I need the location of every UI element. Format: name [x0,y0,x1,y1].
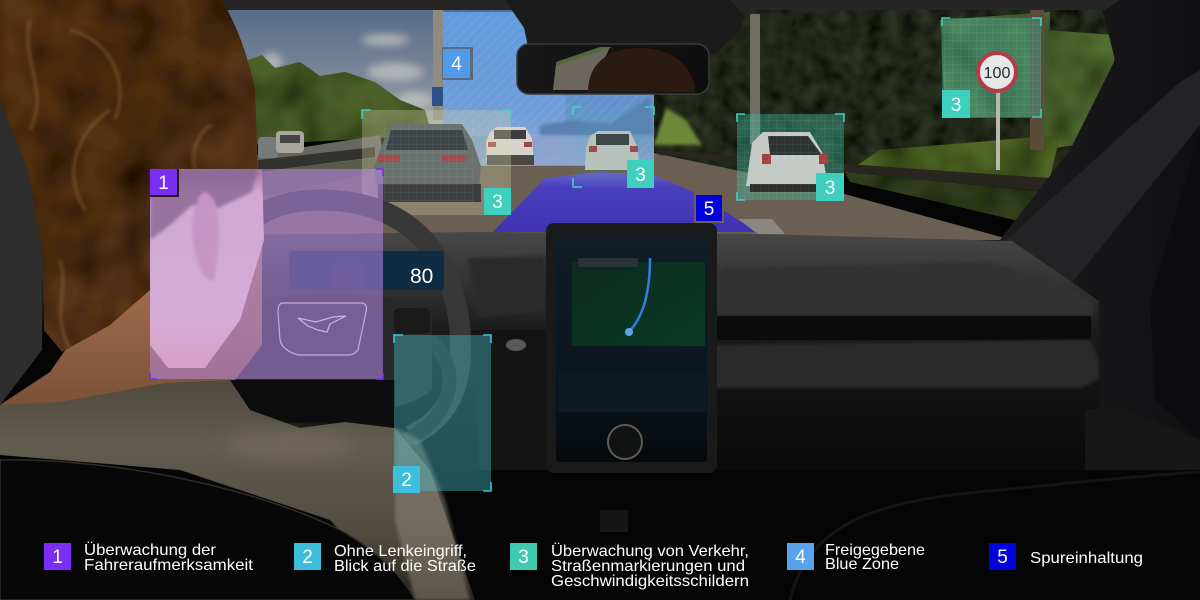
wheel hub [215,293,432,416]
badge 5: 5 [704,199,714,220]
dashboard top [222,232,1098,330]
right door trim [1150,130,1200,440]
overlay box 3a: traffic left [362,110,511,215]
legend [44,541,1143,590]
mirror green verge [556,47,612,66]
far road left [250,135,385,185]
legend item 5: Spureinhaltung [1030,550,1143,567]
legend item 4: Freigegebene [825,542,925,559]
far-left cars [258,131,304,158]
road [220,150,1012,240]
map [572,262,705,346]
lower cabin [200,300,1100,500]
overlay box 1: driver attention [150,169,383,379]
guard rail far [258,147,375,172]
right pillar [1000,0,1200,480]
legend item 2: Ohne Lenkeingriff, [334,543,467,560]
ear [192,192,219,281]
steering wheel [215,200,461,440]
sky [225,6,565,136]
legend item 1: 1 [52,547,63,568]
highway pole [433,10,443,120]
legend item 2 [294,543,476,575]
overlay box 3b: traffic centre [573,107,654,188]
badge 5 [694,193,724,223]
badge 3 centre: 3 [635,165,646,186]
silver hatch [585,131,640,170]
green slope [654,108,702,145]
mirror [517,44,709,94]
driver hair [0,0,258,352]
VW Polo [746,132,828,192]
wheel lower rim [405,340,449,440]
curls [28,20,212,350]
search bar [578,258,638,267]
distant trees tint [540,96,654,135]
wheel rim [218,200,461,436]
left spoke controls [222,312,258,342]
vent strip [716,316,1091,340]
route line [629,258,650,332]
climate panel [558,372,706,412]
lamp pole right [750,14,760,144]
clouds [262,34,433,108]
driver neck [0,200,262,410]
driver in mirror [588,48,695,92]
instrument cluster [289,251,444,290]
shirt highlight on shoulder [225,431,355,459]
overlay box 3d: speed sign [942,18,1041,117]
legend item 3: Straßenmarkierungen und [551,558,745,575]
legend item 4: Blue Zone [825,556,899,573]
legend item 4: 4 [795,547,806,568]
corner brackets [394,335,491,491]
legend item 3 [510,542,749,590]
pillar highlight [1003,70,1200,295]
badge 2 [393,466,420,493]
road through blue zone [470,135,654,166]
badge 2: 2 [401,470,412,491]
car: grey sedan [374,124,481,202]
instrument cluster: 80 [410,265,433,288]
temperature knob [608,425,642,459]
left dash dark panel [468,256,546,318]
overlay: lane keeping area (5) [493,172,757,232]
badge 3 centre [627,160,654,188]
left console area [470,330,546,470]
headrest [0,100,43,405]
driver shirt [0,380,475,600]
speed limit sign 100 [978,53,1016,170]
white SUV [486,127,534,165]
blue road sign [432,87,443,106]
trees left [248,55,432,145]
corner brackets [150,169,383,379]
pony badge pad [278,303,366,355]
legend item 1: Fahreraufmerksamkeit [84,557,254,574]
legend item 5 [989,543,1143,570]
speed limit sign 100: 100 [984,65,1011,82]
legend item 1: Überwachung der [84,541,217,559]
badge 3 right: 3 [825,178,835,199]
nav tiles [330,262,366,288]
legend item 2: Blick auf die Straße [334,558,476,575]
badge 3 sign [942,90,970,118]
dashboard pad [716,262,1093,316]
bright foliage right [1040,30,1115,150]
roadside bushes [845,172,1045,226]
lower trim [714,340,1099,388]
pony logo [298,316,346,332]
shirt highlight near sleeve [395,428,470,600]
passenger door panel [1085,406,1200,480]
legend item 1 [44,541,254,574]
badge 3 sign: 3 [951,95,961,116]
tree trunk [1030,10,1044,150]
driver face and ear [150,169,264,368]
badge 1 [150,169,179,197]
overlay box 2: hands off [394,335,491,491]
guard rail right [655,150,1048,192]
overlay box 3c: traffic right [737,114,844,200]
bright foliage near sign [940,12,1050,118]
dial [506,339,526,351]
screen display [556,234,707,462]
legend item 4 [787,542,925,573]
badge 4 [442,47,473,80]
badge 4: 4 [451,54,462,75]
passenger seat [790,472,1200,600]
legend item 3: 3 [518,547,529,568]
column lower dark [230,380,395,435]
legend item 3: Überwachung von Verkehr, [551,542,749,560]
legend item 5: 5 [997,547,1008,568]
central touchscreen [546,223,717,473]
bottom dark area [470,470,1200,600]
centre console [600,510,628,532]
badge 1: 1 [158,173,169,194]
hair above ear [150,169,258,240]
headliner [0,0,1120,10]
mirror reflection road [553,47,610,90]
driver seat [0,460,415,600]
badge 3 right [816,173,844,201]
overlay: Blue Zone hatch (4) [443,12,654,170]
photo: view through windscreen [220,6,1120,240]
median strip [258,158,375,198]
right trees [640,8,1120,173]
position marker [625,328,633,336]
legend item 3: Geschwindigkeitsschildern [551,573,749,590]
road lane mark [738,219,785,234]
rear-view mirror mount [505,0,745,55]
grass verge [850,135,1060,178]
right spoke controls [394,308,430,334]
badge 3 left: 3 [492,192,503,213]
badge 3 left [484,188,511,215]
legend item 2: 2 [302,547,313,568]
